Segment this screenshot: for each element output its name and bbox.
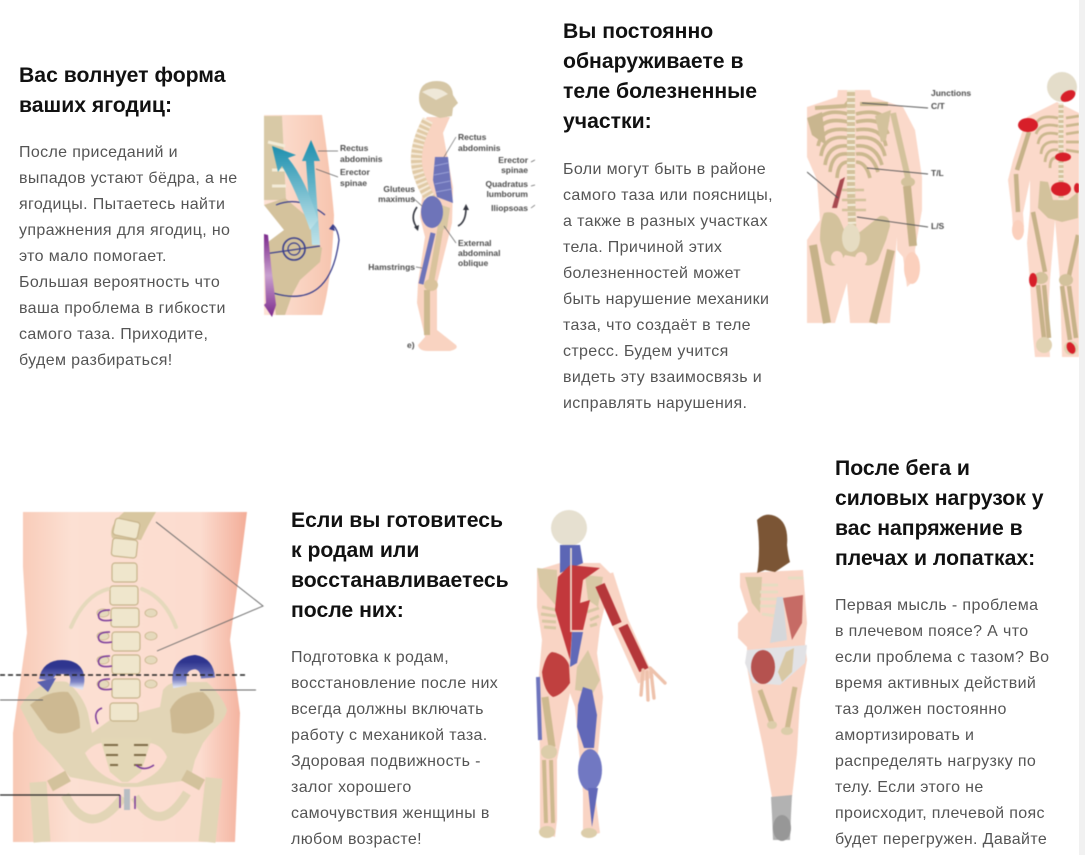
arm bones [893,113,908,178]
heading: childbirth [291,509,509,622]
text: painful areas: стресс. Будем учится [563,343,729,360]
spine [416,120,436,206]
runner ribs [760,578,803,616]
text: running and strength: телу. Если этого не [835,779,984,796]
text: childbirth [291,649,498,848]
heading: painful areas: теле болезненные [563,80,757,103]
illustration: hip and side-view muscles: Iliopsoas [491,203,528,213]
femurs [38,778,214,842]
text: running and strength: в плечевом поясе? А что [835,623,1028,640]
pelvic inlet [85,743,167,783]
text: running and strength [835,597,1049,848]
arm muscles [600,585,617,624]
illustration: hip and side-view muscles: maximus [378,194,415,204]
text: painful areas: видеть эту взаимосвязь и [563,369,762,386]
red back muscle [555,565,600,660]
text: painful areas [563,161,773,412]
heading: painful areas [563,20,757,133]
illustration: hip and side-view muscles: Gluteus [383,184,415,194]
illustration: hip and side-view muscles: lumborum [486,189,528,199]
runner shoe [771,795,792,840]
text: running and strength: амортизировать и [835,727,974,744]
illustration: hip and side-view muscles: abdominis [458,143,501,153]
text: running and strength: если проблема с тазом? Во [835,649,1049,666]
right pelvis [575,650,600,693]
hand [904,252,920,284]
left leg [538,677,540,740]
skull [419,81,458,118]
abdominal muscles [433,157,453,203]
lumbar vertebrae [110,608,140,721]
upper spine [111,512,156,540]
heading: running and strength: плечах и лопатках: [835,547,1035,570]
text: painful areas: тела. Причиной этих [563,239,722,256]
illustration: hip and side-view muscles: e) [407,340,415,350]
runner pelvis [745,645,807,685]
spine [851,90,853,250]
runner body [738,570,807,797]
floating ribs [71,589,176,627]
blue arrows [46,667,77,688]
labels: Rectus [340,143,369,153]
text: painful areas: болезненностей может [563,265,741,282]
text: running and strength: происходит, плечевой пояс [835,805,1045,822]
transverse processes [97,609,157,688]
labels: Junctions [931,88,971,98]
illustration: back skeleton with junctions and pain spots [806,72,1079,358]
pelvis [820,212,890,266]
skin [13,512,247,842]
illustration: hip and side-view muscles: Erector [498,155,529,165]
illustration: hip and side-view muscles: spinae [340,178,367,188]
runner hair [757,515,790,573]
text: running and strength: время активных действий [835,675,1036,692]
right figure hand [1012,220,1024,240]
glute [542,652,570,697]
hip bone [264,198,322,315]
illustration: back skeleton with junctions and pain spots: C/T [931,101,946,111]
right figure skin [1008,102,1079,357]
illustration: hip and side-view muscles: External [458,238,492,248]
text: painful areas: быть нарушение механики [563,291,769,308]
illustration: back skeleton with junctions and pain spots: L/S [931,221,945,231]
text: childbirth: залог хорошего [291,779,412,796]
illustration: hip and side-view muscles: abdominis [340,154,383,164]
scapulas [537,568,557,607]
runner back strip [770,597,787,643]
text: glutes: ягодицы. Пытаетесь найти [19,196,225,213]
ribs [815,112,888,178]
heading: running and strength: После бега и [835,457,970,480]
illustration: hip and side-view muscles: oblique [458,258,488,268]
leaders [0,522,263,700]
hip skin [264,115,334,315]
dashed line [0,674,247,676]
heading: childbirth: Если вы готовитесь [291,509,503,532]
ribs [541,607,599,628]
shoulders [815,100,888,108]
panel: running and strength [535,457,1049,848]
heading: childbirth: после них: [291,599,404,622]
text: glutes: будем разбираться! [19,352,173,369]
text: painful areas: таза, что создаёт в теле [563,317,751,334]
torso skin [807,90,922,323]
text: painful areas: а также в разных участках [563,213,768,230]
illustration: hip and side-view muscles: Rectus [458,132,487,142]
panel: painful areas [563,20,1079,412]
text: childbirth: самочувствия женщины в [291,805,490,822]
right figure skull [1047,72,1077,102]
neck muscles [560,545,583,573]
text: glutes: Большая вероятность что [19,274,220,291]
panel: childbirth [0,509,509,848]
illustration: back skeleton with junctions and pain spots: T/L [931,168,944,178]
text: painful areas: Боли могут быть в районе [563,161,766,178]
right figure spine [1058,103,1064,205]
illustration: hip and side-view muscles: Hamstrings [368,262,415,272]
pelvis [20,681,227,787]
red muscle [832,177,845,208]
heading: glutes [19,64,226,117]
heading: painful areas: обнаруживаете в [563,50,743,73]
text: childbirth: всегда должны включать [291,701,484,718]
text: glutes: После приседаний и [19,144,178,161]
right figure ribs [1036,116,1079,168]
text: running and strength: будет перегружен. Давайте [835,831,1047,848]
heading: running and strength [835,457,1044,570]
back figure arm [605,575,646,680]
text: childbirth: Здоровая подвижность - [291,753,481,770]
lumbar muscle [570,632,583,667]
text: glutes: ваша проблема в гибкости [19,300,226,317]
illustration: hip and side-view muscles: spinae [501,165,528,175]
heading: painful areas: участки: [563,110,652,133]
text: glutes: самого таза. Приходите, [19,326,208,343]
text: glutes: упражнения для ягодиц, но [19,222,230,239]
text: glutes: это мало помогает. [19,248,167,265]
spine [264,116,286,200]
pelvis and legs [421,233,433,284]
text: glutes: выпадов устают бёдра, а не [19,170,238,187]
panel: glutes [19,64,536,369]
purple arrow [264,234,276,317]
heading: childbirth: восстанавливаетесь [291,569,509,592]
femurs [813,245,891,323]
text: painful areas: самого таза или поясницы, [563,187,773,204]
leaders [316,137,535,268]
hand [641,668,665,700]
illustration: hip and side-view muscles: Erector [340,167,370,177]
runner scapula [745,577,762,613]
runner lat muscle [783,595,803,640]
skull [551,510,587,546]
text: childbirth: любом возрасте! [291,831,422,848]
heading: running and strength: вас напряжение в [835,517,1023,540]
arrows [413,207,466,229]
illustration: hip and side-view muscles: Quadratus [485,179,528,189]
right figure pelvis and limbs [1038,181,1078,222]
back figure body [537,563,612,837]
text: childbirth: Подготовка к родам, [291,649,449,666]
heading: childbirth: к родам или [291,539,419,562]
heading: glutes: ваших ягодиц: [19,94,172,117]
runner femurs [760,687,795,730]
pain spots [1018,88,1080,355]
text: running and strength: распределять нагрузку по [835,753,1036,770]
text: running and strength: таз должен постоянно [835,701,1007,718]
illustration: hip and side-view muscles: abdominal [458,248,501,258]
text: childbirth: восстановление после них [291,675,498,692]
heading: glutes: Вас волнует форма [19,64,225,87]
symphysis [124,789,130,810]
side figure skin [413,117,457,351]
illustration: hip and side-view muscles [263,80,536,352]
right leg hamstrings and calf [577,687,597,748]
text: childbirth: работу с механикой таза. [291,727,488,744]
purple arrows [96,610,154,809]
text: glutes [19,144,238,369]
leaders [807,103,928,227]
pubic rami [65,793,187,819]
teal arrows [302,140,320,245]
illustration: front view of pelvis and lumbar spine [0,512,264,844]
heading: running and strength: силовых нагрузок у [835,487,1044,510]
sacrum [100,738,152,782]
text: painful areas: исправлять нарушения. [563,395,747,412]
heading: painful areas: Вы постоянно [563,20,713,43]
illustration: back figure and runner [535,510,808,842]
text: running and strength: Первая мысль - проблема [835,597,1038,614]
